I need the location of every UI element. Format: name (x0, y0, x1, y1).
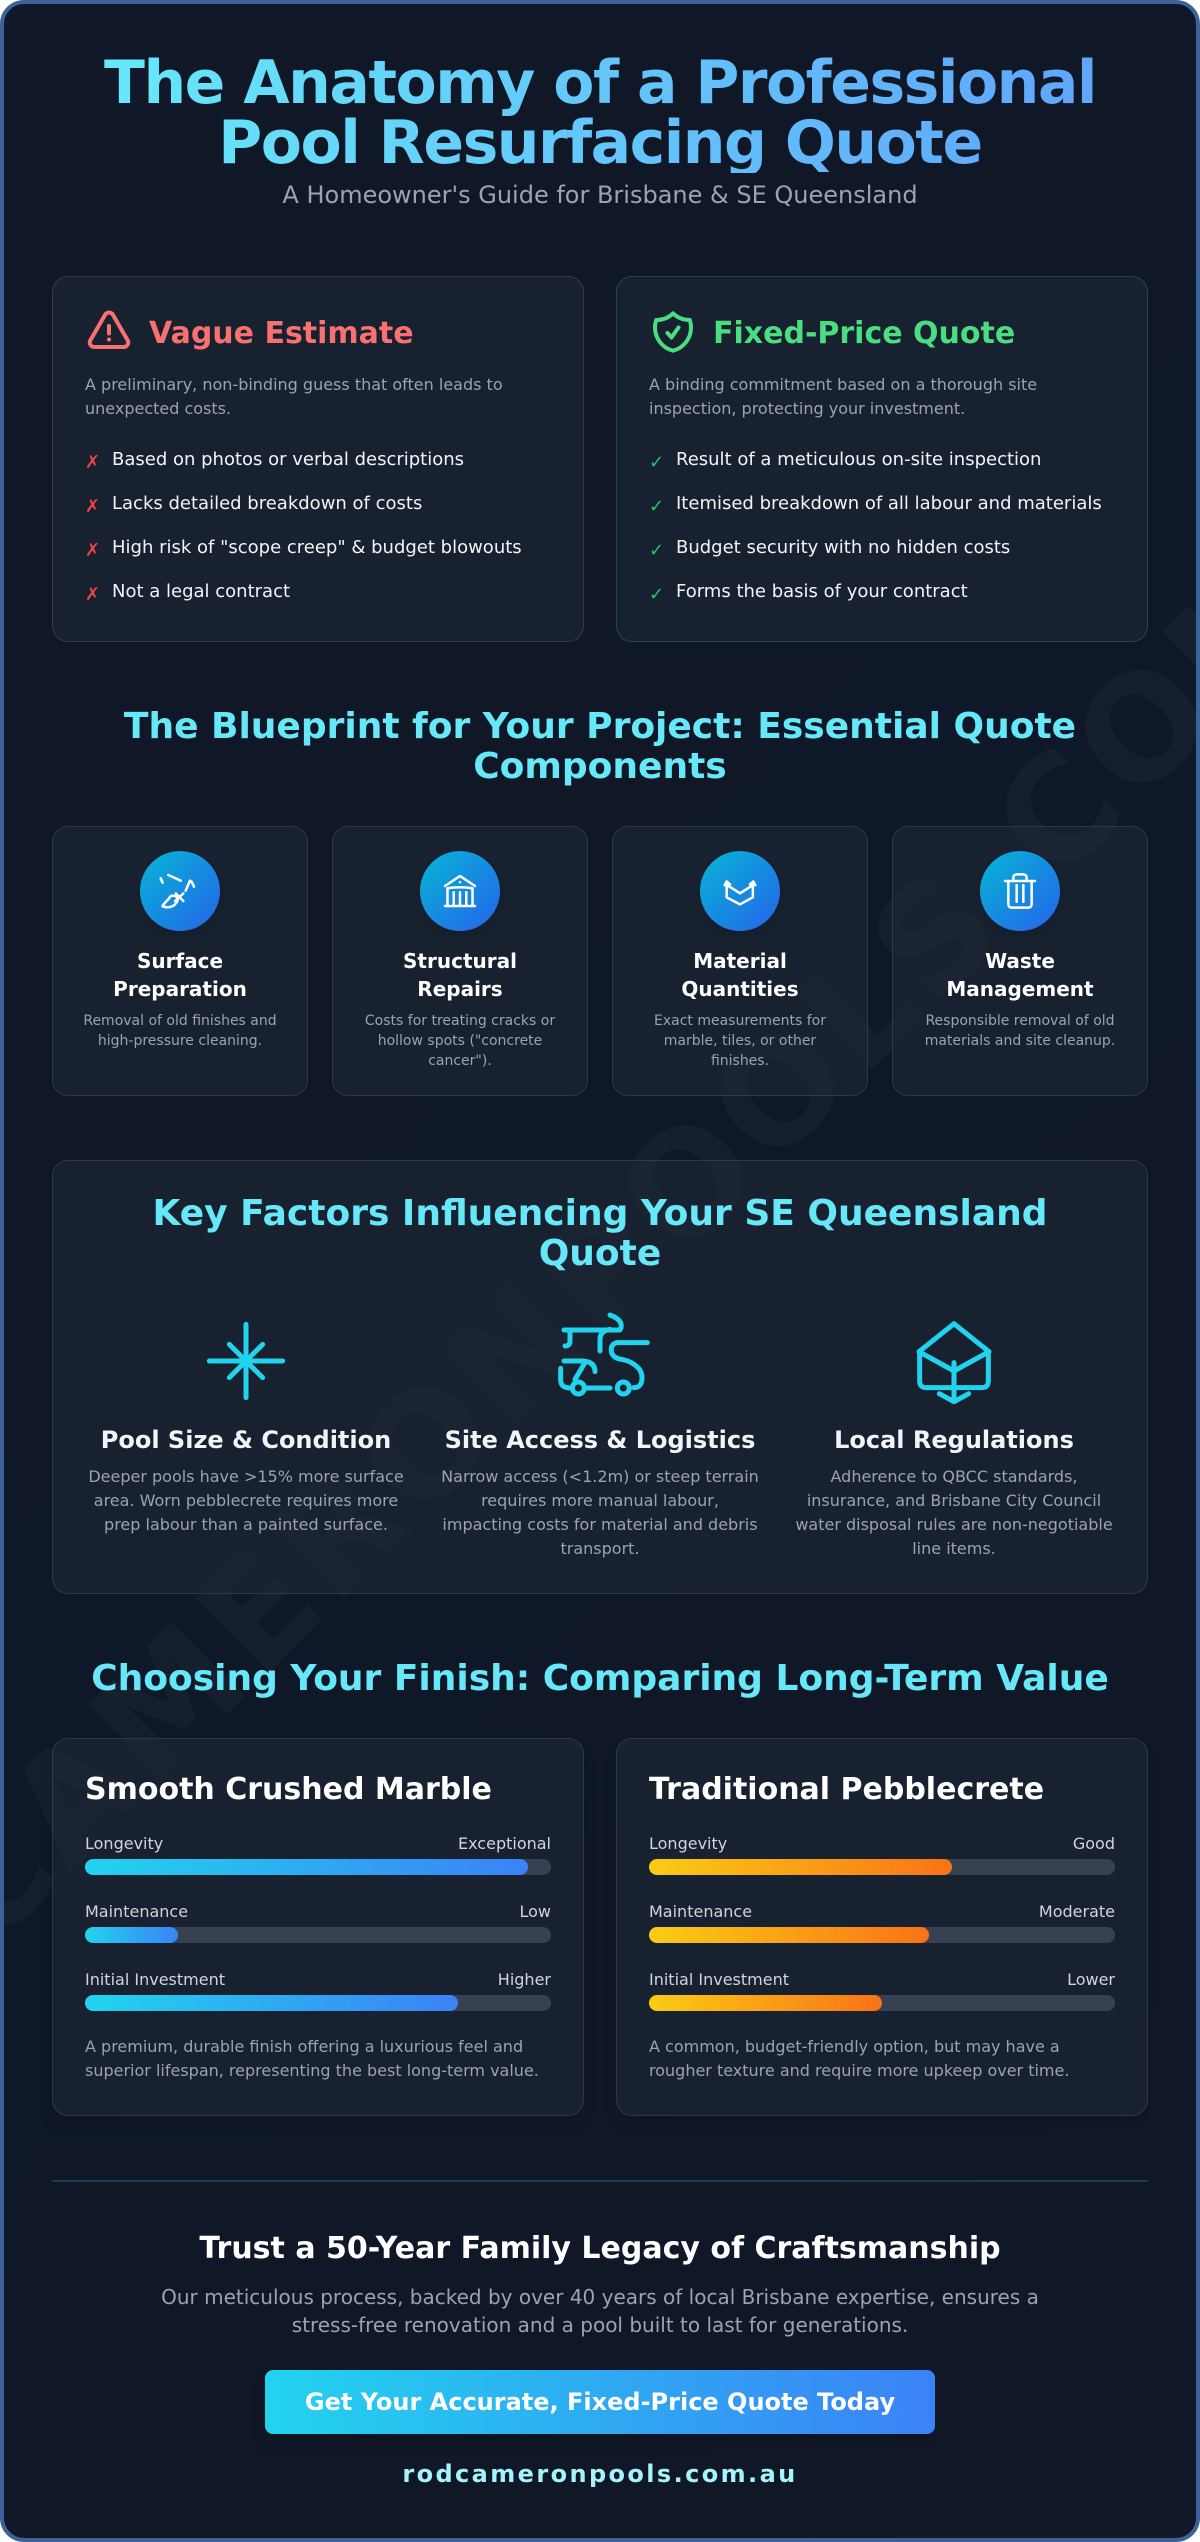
bar: maintenance (649, 1902, 1115, 1943)
text: A premium, durable finish offering a luxurious feel and (85, 2037, 523, 2056)
footer text: stress-free renovation and a pool built to last for generations. (292, 2313, 908, 2337)
list item: Not a legal contract (112, 581, 290, 602)
list item: ✓ (649, 496, 664, 517)
list item: Itemised breakdown of all labour and materials (676, 493, 1102, 514)
list item: ✓ (649, 584, 664, 605)
list item: Result of a meticulous on-site inspection (676, 449, 1041, 470)
text: A common, budget-friendly option, but may have a (649, 2037, 1060, 2056)
bar: maintenance: Moderate (1039, 1902, 1115, 1921)
text: transport. (560, 1539, 640, 1558)
description: A binding commitment based on a thorough site (649, 375, 1037, 394)
heading: Fixed-Price Quote (713, 316, 1015, 351)
bar: maintenance (85, 1902, 551, 1943)
heading: Vague Estimate (149, 316, 414, 351)
text: cancer"). (428, 1053, 492, 1069)
text (795, 1467, 1113, 1558)
text: Responsible removal of old (925, 1013, 1115, 1029)
text: Removal of old finishes and (83, 1013, 277, 1029)
panel: traditional pebblecrete (616, 1738, 1148, 2116)
bar: longevity: Longevity (85, 1834, 163, 1853)
text (649, 2037, 1069, 2080)
text (83, 1013, 277, 1049)
list item: ✗ (85, 452, 100, 473)
bar: maintenance: Low (519, 1902, 551, 1921)
header (104, 48, 1096, 209)
title: Traditional Pebblecrete (649, 1772, 1044, 1807)
icon: truck (558, 1312, 650, 1396)
title (113, 949, 247, 1001)
bar: initial investment: Initial Investment (649, 1970, 789, 1989)
bar: longevity: Good (1073, 1834, 1115, 1853)
heading: Key Factors Influencing Your SE Queensland (152, 1193, 1048, 1234)
factor: pool size (88, 1322, 404, 1534)
text: superior lifespan, representing the best long-term value. (85, 2061, 539, 2080)
title: Surface (137, 949, 223, 973)
text: Exact measurements for (654, 1013, 826, 1029)
title: Waste (985, 949, 1055, 973)
icon: shield check (653, 311, 693, 353)
text: hollow spots ("concrete (378, 1033, 542, 1049)
list item: ✗ (85, 540, 100, 561)
panel: smooth crushed marble (52, 1738, 584, 2116)
factor: site access (441, 1312, 759, 1558)
description: inspection, protecting your investment. (649, 399, 965, 418)
heading (152, 1193, 1048, 1274)
list item: Lacks detailed breakdown of costs (112, 493, 422, 514)
text: requires more manual labour, (481, 1491, 719, 1510)
icon: brush (140, 851, 220, 931)
description (85, 375, 503, 418)
description (649, 375, 1037, 418)
title: Site Access & Logistics (445, 1426, 755, 1454)
footer (4, 2220, 1196, 2510)
text: marble, tiles, or other (664, 1033, 816, 1049)
text: materials and site cleanup. (925, 1033, 1115, 1049)
list item: ✓ (649, 540, 664, 561)
title (104, 53, 1096, 173)
panel: vague estimate (52, 276, 584, 642)
title: Preparation (113, 977, 247, 1001)
title: Structural (403, 949, 517, 973)
bar: longevity (85, 1834, 551, 1875)
footer text: Our meticulous process, backed by over 40 years of local Brisbane expertise, ensures a (161, 2285, 1039, 2309)
button (265, 2370, 935, 2434)
bar: initial investment: Lower (1067, 1970, 1115, 1989)
bar: initial investment: Higher (498, 1970, 551, 1989)
heading: blueprint: The Blueprint for Your Project: Essential Quote (124, 706, 1076, 747)
list item: ✗ (85, 584, 100, 605)
text: Costs for treating cracks or (365, 1013, 555, 1029)
list item: High risk of "scope creep" & budget blowouts (112, 537, 522, 558)
website link: rodcameronpools.com.au (402, 2460, 798, 2488)
title: Pool Resurfacing Quote (218, 108, 982, 178)
button: Get Your Accurate, Fixed-Price Quote Today (305, 2388, 895, 2416)
text: finishes. (711, 1053, 769, 1069)
text: impacting costs for material and debris (442, 1515, 758, 1534)
text: area. Worn pebblecrete requires more (94, 1491, 398, 1510)
bar: initial investment: Initial Investment (85, 1970, 225, 1989)
title: Quantities (681, 977, 799, 1001)
bar: initial investment (649, 1970, 1115, 2011)
text (441, 1467, 759, 1558)
icon: box (916, 1321, 992, 1404)
title: Smooth Crushed Marble (85, 1772, 492, 1807)
factor: regulations (795, 1321, 1113, 1558)
bar: maintenance: Maintenance (85, 1902, 188, 1921)
icon: building (420, 851, 500, 931)
text (925, 1013, 1115, 1049)
bar: longevity (649, 1834, 1115, 1875)
list item: ✗ (85, 496, 100, 517)
list item: Based on photos or verbal descriptions (112, 449, 464, 470)
title: Management (946, 977, 1094, 1001)
footer title: Trust a 50-Year Family Legacy of Craftsmanship (199, 2231, 1001, 2266)
title (403, 949, 517, 1001)
footer text (4, 2283, 1196, 2339)
text: prep labour than a painted surface. (104, 1515, 388, 1534)
text: line items. (912, 1539, 996, 1558)
list item: Budget security with no hidden costs (676, 537, 1010, 558)
heading: blueprint: Components (473, 746, 727, 787)
bar: initial investment (85, 1970, 551, 2011)
text: water disposal rules are non-negotiable (795, 1515, 1113, 1534)
title (681, 949, 799, 1001)
text (88, 1467, 404, 1534)
title: Pool Size & Condition (101, 1426, 391, 1454)
description: unexpected costs. (85, 399, 231, 418)
panel: structural repairs (332, 826, 588, 1096)
heading: blueprint (124, 706, 1076, 787)
panel: fixed-price quote (616, 276, 1148, 642)
bar: maintenance: Maintenance (649, 1902, 752, 1921)
text: Narrow access (<1.2m) or steep terrain (441, 1467, 759, 1486)
icon: open box (700, 851, 780, 931)
text: high-pressure cleaning. (98, 1033, 262, 1049)
text: insurance, and Brisbane City Council (807, 1491, 1101, 1510)
title: Local Regulations (834, 1426, 1074, 1454)
text: Deeper pools have >15% more surface (88, 1467, 404, 1486)
title: Repairs (417, 977, 503, 1001)
description: A preliminary, non-binding guess that often leads to (85, 375, 503, 394)
title: Material (693, 949, 787, 973)
text: Adherence to QBCC standards, (830, 1467, 1078, 1486)
bar: longevity: Exceptional (458, 1834, 551, 1853)
subtitle: A Homeowner's Guide for Brisbane & SE Queensland (282, 181, 918, 209)
heading: Quote (539, 1233, 661, 1274)
icon: star (206, 1322, 286, 1400)
icon: trash (980, 851, 1060, 931)
icon: warning triangle (88, 310, 130, 349)
text: rougher texture and require more upkeep over time. (649, 2061, 1069, 2080)
heading: finish comparison: Choosing Your Finish: Comparing Long-Term Value (91, 1658, 1109, 1699)
panel: waste management (892, 826, 1148, 1096)
panel: surface preparation (52, 826, 308, 1096)
text (654, 1013, 826, 1069)
title (946, 949, 1094, 1001)
panel: material quantities (612, 826, 868, 1096)
bar: longevity: Longevity (649, 1834, 727, 1853)
text (365, 1013, 556, 1069)
panel: key factors (52, 1160, 1148, 1594)
list item: ✓ (649, 452, 664, 473)
title: The Anatomy of a Professional (104, 48, 1096, 118)
list item: Forms the basis of your contract (676, 581, 968, 602)
text (85, 2037, 539, 2080)
